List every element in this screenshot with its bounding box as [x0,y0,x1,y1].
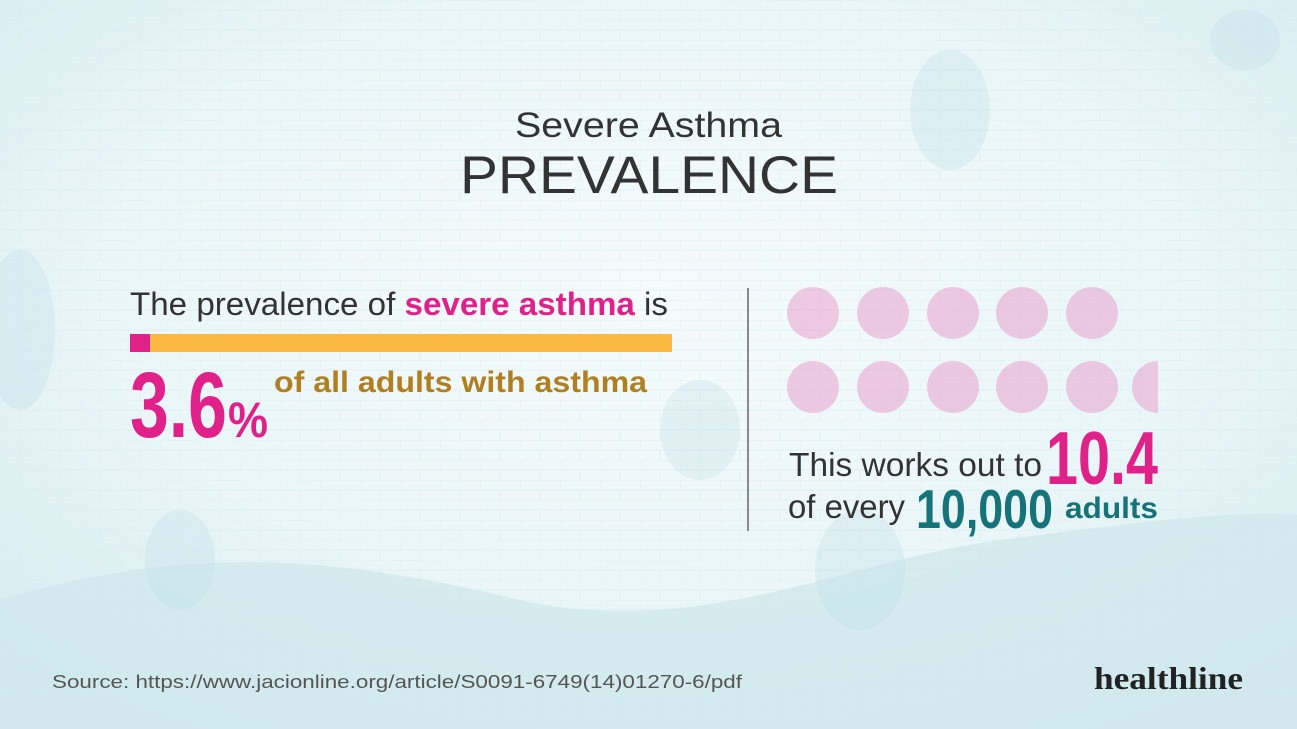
title: Severe Asthma [515,106,783,145]
text block: 10.4 of every 10,000 [788,416,1158,540]
source: Source: https://www.jacionline.org/article/S0091-6749(14)01270-6/pdf [52,672,743,692]
logo: healthline: healthline [1094,660,1243,696]
text block: prevalence statement [130,286,672,457]
title: PREVALENCE [460,146,838,205]
stat: 3.6%: 3.6 [130,353,227,457]
text block: 10.4 of every 10,000: adults [1065,492,1158,525]
text block: 10.4 of every 10,000: of every [788,488,905,525]
dot chart: 10.4 circles [787,287,1158,413]
title [460,106,838,205]
stat: 3.6%: % [228,392,268,448]
text block: 10.4 of every 10,000: 10,000 [916,478,1053,540]
bar chart: 3.6% bar [130,334,672,352]
text block: 10.4 of every 10,000: This works out to [789,446,1042,483]
text block: prevalence statement: The prevalence of severe asthma is [130,286,668,322]
text block: 10.4 of every 10,000: 10.4 [1046,416,1158,500]
text block: prevalence statement: of all adults with asthma [274,366,647,399]
